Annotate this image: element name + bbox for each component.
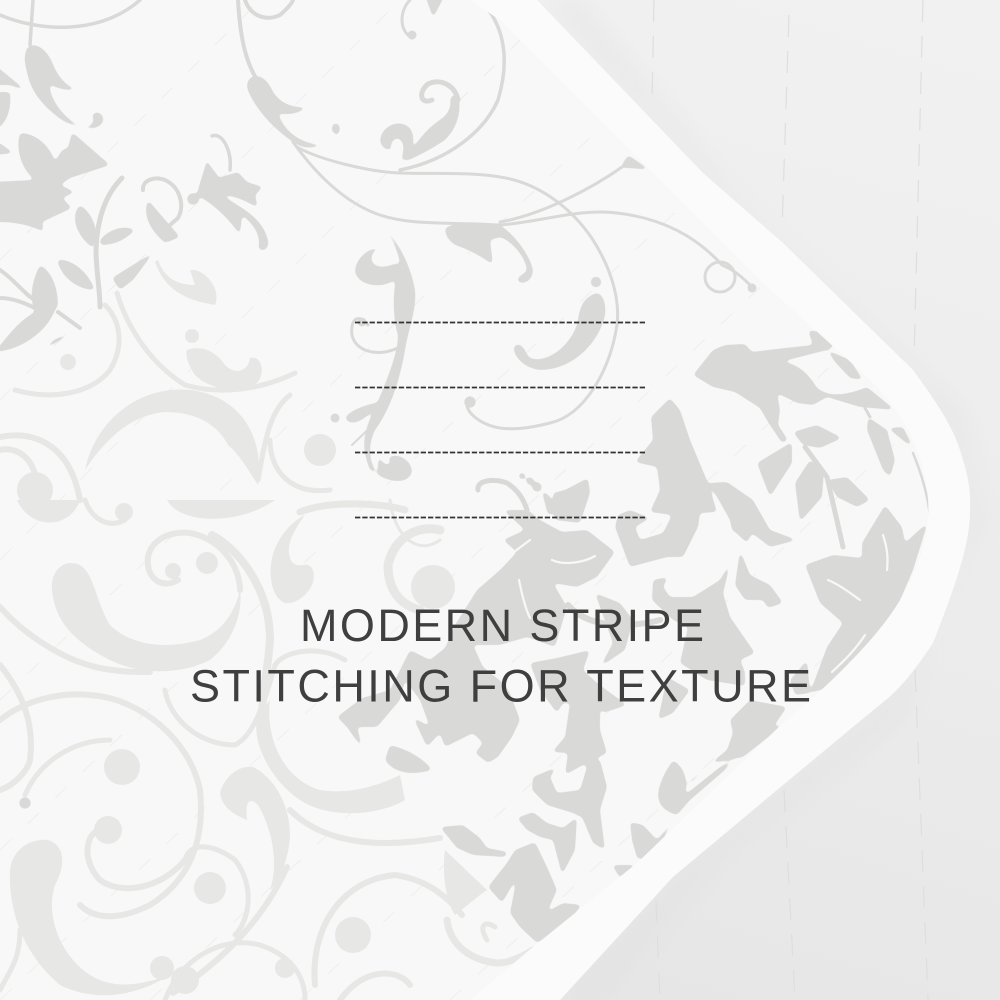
petal highlights bbox=[510, 535, 888, 672]
light damask swirls bbox=[10, 260, 487, 995]
stitched dashed lines graphic bbox=[355, 322, 647, 518]
heading: modern stripe stitching for texture bbox=[190, 600, 811, 712]
heading: modern stripe stitching for texture: STITCHING FOR TEXTURE bbox=[190, 660, 811, 712]
lower flowers bbox=[532, 760, 607, 850]
right leaf branch bbox=[693, 330, 895, 443]
heading: modern stripe stitching for texture: MODERN STRIPE bbox=[300, 600, 704, 651]
quilt shadow bbox=[545, 0, 985, 1000]
central flower and trunk bbox=[615, 398, 717, 567]
right flower bbox=[805, 505, 928, 693]
centre scrolls bbox=[247, 76, 340, 148]
top left floral cluster bbox=[25, 45, 104, 129]
vertical stitch lines on sheet bbox=[652, 0, 928, 1000]
